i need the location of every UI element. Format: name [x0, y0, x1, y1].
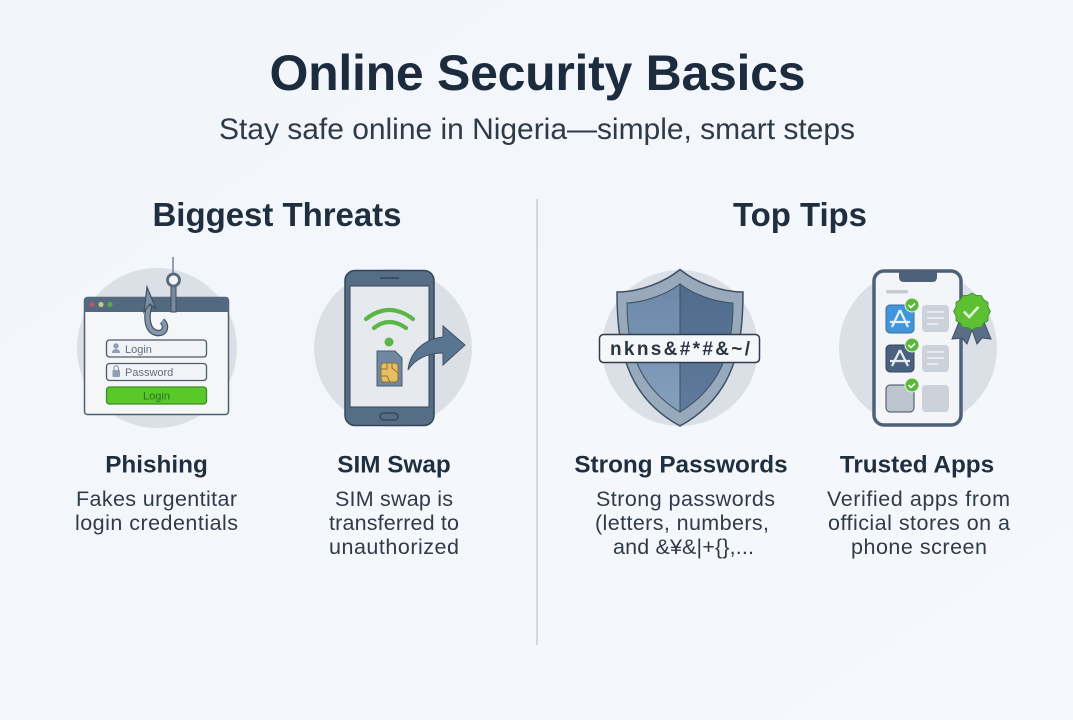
app: dark [886, 345, 914, 372]
text: strong passwords description: Strong passwords [596, 487, 775, 511]
text: phishing description [75, 487, 238, 535]
icon: fishing hook [144, 257, 180, 333]
text: strong passwords description: and &¥&|+{},... [613, 535, 754, 559]
text: strong passwords description: (letters, numbers, [595, 511, 769, 535]
password field: nkns&#*#&~/ [610, 339, 751, 360]
check badges [905, 298, 919, 392]
text: strong passwords description [595, 487, 775, 559]
icon: shield with password [600, 270, 760, 426]
title: Online Security Basics [270, 45, 806, 101]
icon: phone with SIM and arrow [314, 269, 472, 427]
icon: SIM card [377, 351, 402, 386]
label: SIM Swap: SIM Swap [337, 452, 451, 478]
icon: phishing login window: Password [125, 367, 173, 379]
arrow [408, 326, 465, 370]
label: Strong Passwords: Strong Passwords [574, 452, 788, 478]
text: SIM swap description [329, 487, 459, 559]
subtitle: Stay safe online in Nigeria—simple, smart steps [219, 113, 855, 146]
text: phishing description: Fakes urgentitar [76, 487, 237, 511]
icon: phishing login window: Login [143, 390, 170, 402]
icon: phishing login window: Login [125, 344, 152, 356]
heading: Top Tips: Top Tips [733, 196, 867, 233]
icon: verified ribbon [952, 293, 991, 344]
text: SIM swap description: SIM swap is [335, 487, 453, 511]
password field [600, 334, 760, 362]
panel: strong passwords [574, 270, 788, 559]
text: SIM swap description: unauthorized [329, 535, 459, 559]
text: SIM swap description: transferred to [329, 511, 459, 535]
icon: phone with verified apps [839, 269, 997, 427]
text: phishing description: login credentials [75, 511, 238, 535]
text: trusted apps description [827, 487, 1010, 559]
text: trusted apps description: Verified apps from [827, 487, 1010, 511]
icon: phishing login window [77, 257, 237, 428]
panel: SIM swap [314, 269, 472, 559]
icon: wifi [366, 310, 413, 346]
heading: Biggest Threats: Biggest Threats [152, 196, 402, 233]
panel: phishing [75, 257, 238, 535]
label: Trusted Apps: Trusted Apps [840, 452, 994, 478]
text: trusted apps description: official stores on a [828, 511, 1010, 535]
panel: trusted apps [827, 269, 1010, 559]
app: blue [886, 305, 914, 333]
label: Phishing: Phishing [105, 452, 208, 478]
text: trusted apps description: phone screen [851, 535, 987, 559]
